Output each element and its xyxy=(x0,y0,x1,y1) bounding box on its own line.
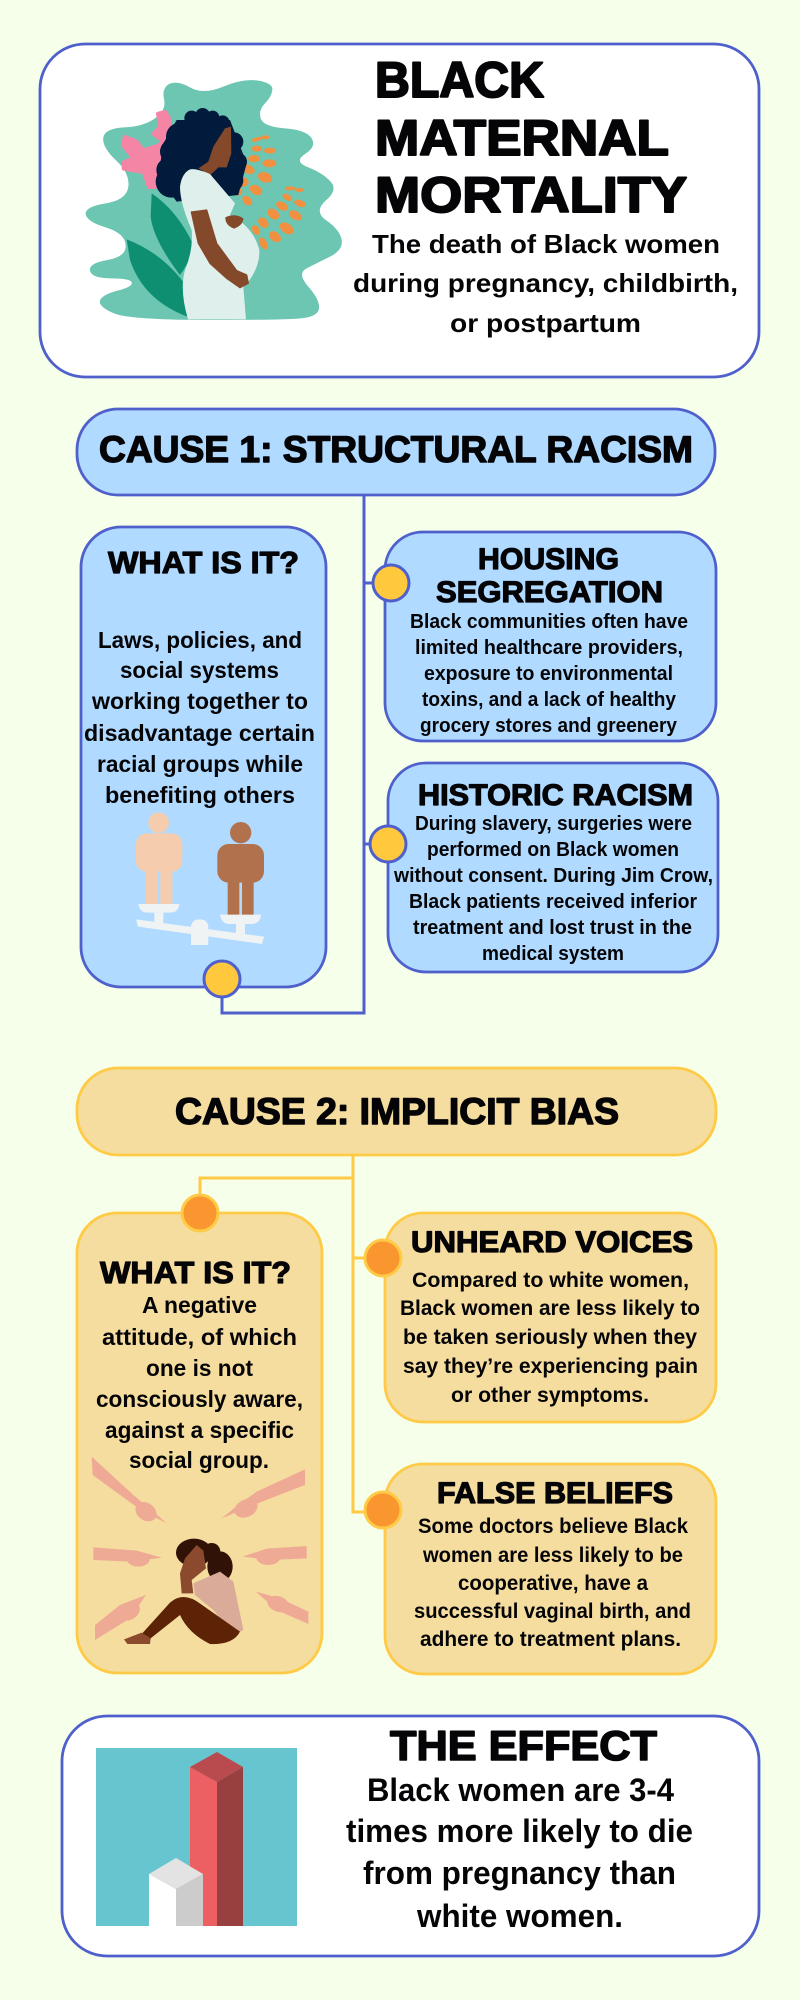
heading: what is it: WHAT IS IT? xyxy=(100,1255,291,1290)
node xyxy=(204,961,240,997)
body text: medical system xyxy=(482,943,624,965)
node xyxy=(370,826,406,862)
panel: housing segregation xyxy=(373,532,716,741)
heading: HISTORIC RACISM xyxy=(418,779,693,812)
heading: FALSE BELIEFS xyxy=(437,1477,673,1510)
definition text: racial groups while xyxy=(97,751,303,777)
body text: Compared to white women, xyxy=(412,1269,689,1292)
definition text: consciously aware, xyxy=(96,1386,303,1412)
panel: historic racism xyxy=(370,763,718,972)
body text: During slavery, surgeries were xyxy=(415,813,692,835)
definition text: social group. xyxy=(129,1447,269,1473)
body text: white women. xyxy=(416,1898,623,1934)
body text: or other symptoms. xyxy=(451,1384,649,1407)
definition text: working together to xyxy=(91,688,308,714)
definition text xyxy=(84,627,315,808)
definition text xyxy=(96,1292,303,1473)
definition text: A negative xyxy=(142,1292,257,1318)
connector: cause 1 xyxy=(222,495,385,1013)
definition text: Laws, policies, and xyxy=(98,627,302,653)
node xyxy=(365,1492,401,1528)
node xyxy=(365,1240,401,1276)
body text: say they’re experiencing pain xyxy=(403,1355,698,1378)
heading: cause 1 xyxy=(77,409,715,495)
definition text: social systems xyxy=(120,657,279,683)
body text: Some doctors believe Black xyxy=(418,1515,688,1538)
subtitle: The death of Black women xyxy=(372,229,720,259)
definition text: attitude, of which xyxy=(102,1324,297,1350)
body text: performed on Black women xyxy=(427,839,679,861)
definition text: one is not xyxy=(146,1355,253,1381)
heading: UNHEARD VOICES xyxy=(411,1226,693,1259)
body text: from pregnancy than xyxy=(363,1855,676,1891)
heading: THE EFFECT xyxy=(390,1722,657,1769)
connector: cause 2 xyxy=(200,1155,383,1512)
subtitle xyxy=(353,229,738,338)
body text: grocery stores and greenery xyxy=(420,715,678,737)
heading: cause 1: CAUSE 1: STRUCTURAL RACISM xyxy=(99,429,693,470)
panel: title header xyxy=(40,44,759,377)
definition text: disadvantage certain xyxy=(84,720,315,746)
heading: HOUSING xyxy=(478,543,619,576)
body text: toxins, and a lack of healthy xyxy=(422,689,677,711)
node xyxy=(182,1195,218,1231)
title text xyxy=(375,52,687,223)
body text: Black women are less likely to xyxy=(400,1297,700,1320)
body text: cooperative, have a xyxy=(458,1572,648,1595)
body text xyxy=(400,1269,700,1407)
heading: SEGREGATION xyxy=(436,576,663,609)
body text: Black women are 3-4 xyxy=(367,1772,674,1808)
illustration: pointing hands around seated woman xyxy=(92,1457,308,1644)
body text xyxy=(410,611,688,737)
panel: what is implicit bias xyxy=(77,1195,322,1673)
definition text: benefiting others xyxy=(105,782,295,808)
definition text: against a specific xyxy=(105,1417,294,1443)
illustration: pregnant woman xyxy=(86,80,342,320)
body text: limited healthcare providers, xyxy=(415,637,683,659)
panel: unheard voices xyxy=(365,1213,716,1422)
body text: successful vaginal birth, and xyxy=(414,1600,691,1623)
body text: exposure to environmental xyxy=(424,663,673,685)
title text: MATERNAL xyxy=(375,110,669,166)
title text: MORTALITY xyxy=(375,167,687,223)
panel: false beliefs xyxy=(365,1464,716,1674)
body text: Black patients received inferior xyxy=(409,891,697,913)
body text xyxy=(346,1772,693,1934)
body text: without consent. During Jim Crow, xyxy=(393,865,713,887)
subtitle: during pregnancy, childbirth, xyxy=(353,268,738,298)
body text xyxy=(414,1515,691,1651)
icon: unequal scale xyxy=(136,812,264,945)
heading: cause 2 xyxy=(77,1068,716,1155)
body text: treatment and lost trust in the xyxy=(413,917,692,939)
node xyxy=(373,565,409,601)
heading: cause 2: CAUSE 2: IMPLICIT BIAS xyxy=(175,1091,619,1132)
chart: white and red 3d bars xyxy=(96,1748,297,1926)
panel: the effect xyxy=(62,1716,759,1956)
body text: women are less likely to be xyxy=(422,1544,683,1567)
heading: what is it: WHAT IS IT? xyxy=(108,545,299,580)
heading xyxy=(436,543,663,609)
body text: be taken seriously when they xyxy=(403,1326,697,1349)
body text: times more likely to die xyxy=(346,1813,693,1849)
panel: what is structural racism xyxy=(81,527,326,997)
body text: Black communities often have xyxy=(410,611,688,633)
title text: BLACK xyxy=(375,52,544,108)
subtitle: or postpartum xyxy=(450,308,641,338)
body text: adhere to treatment plans. xyxy=(420,1628,681,1651)
body text xyxy=(393,813,713,965)
